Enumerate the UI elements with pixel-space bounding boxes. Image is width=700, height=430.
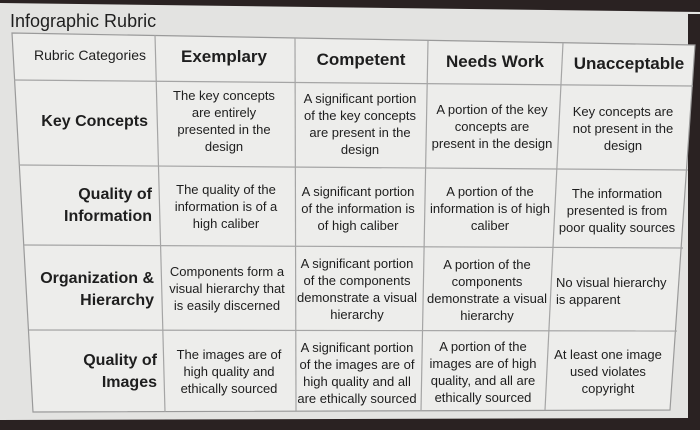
row: key concepts: design bbox=[205, 139, 243, 154]
row: key concepts: design bbox=[604, 138, 642, 153]
row: key concepts: A portion of the key bbox=[436, 102, 548, 117]
row: quality of images: quality, and all are bbox=[431, 373, 535, 388]
row: key concepts: not present in the bbox=[573, 121, 673, 136]
row: organization & hierarchy: Organization & bbox=[40, 270, 154, 287]
title: Infographic Rubric bbox=[10, 11, 156, 31]
row: quality of images: At least one image bbox=[554, 347, 662, 362]
row: quality of images: are ethically sourced bbox=[297, 391, 417, 406]
row: quality of information: caliber bbox=[471, 218, 510, 233]
row: quality of images: A significant portion bbox=[301, 340, 413, 355]
row: key concepts bbox=[41, 88, 673, 157]
row: quality of images: high quality and all bbox=[303, 374, 411, 389]
row: quality of information bbox=[64, 182, 676, 235]
header row: Unacceptable bbox=[574, 54, 684, 73]
row: quality of images: ethically sourced bbox=[181, 381, 277, 396]
row: organization & hierarchy: hierarchy bbox=[460, 308, 514, 323]
row: organization & hierarchy: A significant portion bbox=[301, 256, 413, 271]
row: organization & hierarchy: of the components bbox=[304, 273, 411, 288]
row: quality of information: The information bbox=[572, 186, 662, 201]
row: quality of information: The quality of the bbox=[176, 182, 276, 197]
row: organization & hierarchy: is apparent bbox=[556, 292, 621, 307]
row: quality of images: Images bbox=[102, 374, 157, 391]
row: quality of information: information is of high bbox=[430, 201, 550, 216]
header row: Rubric Categories bbox=[34, 47, 146, 63]
row: quality of information: high caliber bbox=[193, 216, 260, 231]
row: key concepts: design bbox=[341, 142, 379, 157]
row: quality of images: ethically sourced bbox=[435, 390, 531, 405]
row: organization & hierarchy bbox=[40, 256, 667, 323]
row: organization & hierarchy: demonstrate a visual bbox=[297, 290, 417, 305]
row: organization & hierarchy: demonstrate a visual bbox=[427, 291, 547, 306]
row: quality of information: Quality of bbox=[78, 186, 153, 203]
row: key concepts: Key concepts are bbox=[573, 104, 673, 119]
header row bbox=[34, 47, 684, 73]
row: organization & hierarchy: hierarchy bbox=[330, 307, 384, 322]
row: key concepts: of the key concepts bbox=[304, 108, 417, 123]
row: key concepts: are entirely bbox=[192, 105, 257, 120]
row: quality of information: A significant portion bbox=[302, 184, 414, 199]
row: quality of images: A portion of the bbox=[439, 339, 527, 354]
row: key concepts: A significant portion bbox=[304, 91, 416, 106]
row: quality of information: of high caliber bbox=[318, 218, 399, 233]
row: quality of information: information is of a bbox=[175, 199, 278, 214]
row: organization & hierarchy: No visual hierarchy bbox=[556, 275, 667, 290]
header row: Exemplary bbox=[181, 47, 268, 66]
row: quality of images bbox=[83, 339, 662, 406]
row: quality of images: copyright bbox=[582, 381, 635, 396]
row: quality of images: high quality and bbox=[183, 364, 275, 379]
row: quality of images: used violates bbox=[570, 364, 646, 379]
header row: Competent bbox=[317, 50, 406, 69]
row: quality of information: Information bbox=[64, 208, 152, 225]
row: key concepts: present in the design bbox=[432, 136, 552, 151]
row: organization & hierarchy: A portion of the bbox=[443, 257, 531, 272]
row: quality of information: poor quality sources bbox=[559, 220, 676, 235]
row: organization & hierarchy: is easily discerned bbox=[174, 298, 280, 313]
row: key concepts: The key concepts bbox=[173, 88, 275, 103]
header row: Needs Work bbox=[446, 52, 545, 71]
row: organization & hierarchy: components bbox=[452, 274, 523, 289]
row: quality of information: presented is from bbox=[567, 203, 667, 218]
row: key concepts: are present in the bbox=[309, 125, 411, 140]
row: key concepts: concepts are bbox=[455, 119, 529, 134]
row: key concepts: Key Concepts bbox=[41, 113, 148, 130]
row: key concepts: presented in the bbox=[177, 122, 271, 137]
row: quality of images: images are of high bbox=[430, 356, 536, 371]
row: quality of images: Quality of bbox=[83, 352, 158, 369]
row: organization & hierarchy: visual hierarchy that bbox=[169, 281, 285, 296]
row: quality of information: of the information is bbox=[301, 201, 415, 216]
row: organization & hierarchy: Components form a bbox=[170, 264, 285, 279]
row: quality of information: A portion of the bbox=[446, 184, 534, 199]
row: quality of images: The images are of bbox=[177, 347, 282, 362]
row: organization & hierarchy: Hierarchy bbox=[80, 292, 154, 309]
row: quality of images: of the images are of bbox=[300, 357, 415, 372]
